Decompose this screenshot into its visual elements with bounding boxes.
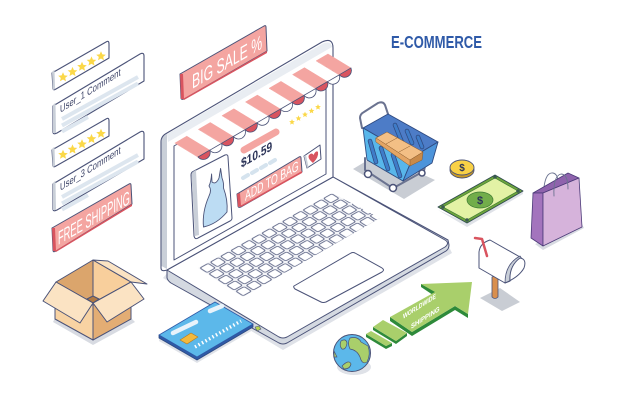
cart shadow [353,154,435,199]
cart back wall [363,114,438,157]
product name bar [244,132,276,150]
bag handle back [544,173,558,187]
card chip [180,333,198,344]
awning [175,54,351,160]
note dollar sign: $ [477,195,483,207]
arrow edge [390,284,468,336]
mailbox post [492,275,498,298]
keyboard [198,193,380,297]
comment username: User_3 Comment [60,144,121,194]
cart right face [403,142,438,181]
parcels in cart [376,132,423,166]
banner: big sale [180,26,267,100]
coin [450,160,474,178]
panel: first star rating [52,41,109,90]
shopping cart [353,102,438,199]
banknote [438,175,523,227]
add to bag button [237,157,302,207]
banner text: BIG SALE % [192,31,262,94]
mailbox flag [475,238,487,256]
card stripe [173,306,222,333]
shipping arrow [366,282,472,349]
note circle [467,192,493,208]
panel: User_3 comment [53,131,144,211]
continents [334,338,369,369]
cart wheels [364,170,425,192]
arrow tail pieces [373,327,407,344]
panel: second star rating [52,118,109,167]
dollar sign: $ [459,163,465,174]
favourite button with heart [304,145,321,168]
comment lines [62,77,138,132]
globe [334,334,371,375]
banner text: FREE SHIPPING [58,187,130,250]
product card with dress [191,155,232,239]
laptop screen [161,40,351,271]
rating stars [58,51,106,81]
cart frame [360,102,425,187]
laptop base [167,177,449,344]
banner: free shipping [52,184,132,252]
comment lines [62,155,138,210]
product rating [289,104,321,125]
mailbox [475,238,525,311]
note corners [441,175,520,222]
price: $10.59 [241,138,272,171]
mailbox body [479,240,520,283]
comment username: User_1 Comment [60,66,121,116]
laptop port [255,326,261,331]
description dashes [243,160,275,178]
cardboard box [43,260,147,345]
arrow body [390,282,472,332]
shopping bag [531,173,584,250]
card number [195,321,241,347]
credit card [159,302,253,363]
arrow text: WORLDWIDE [403,292,436,321]
rating stars [58,129,106,159]
cart slots [370,125,422,176]
button text: ADD TO BAG [245,157,299,204]
panel: User_1 comment [53,53,144,134]
laptop shadow [163,245,452,350]
shipping arrow: SHIPPING [411,305,440,331]
trackpad [294,252,384,302]
bag handle front [554,174,568,196]
dress [203,168,227,227]
mailbox base [480,288,520,311]
laptop [161,40,452,350]
title: E-COMMERCE [391,32,482,52]
cart left face [363,128,413,181]
